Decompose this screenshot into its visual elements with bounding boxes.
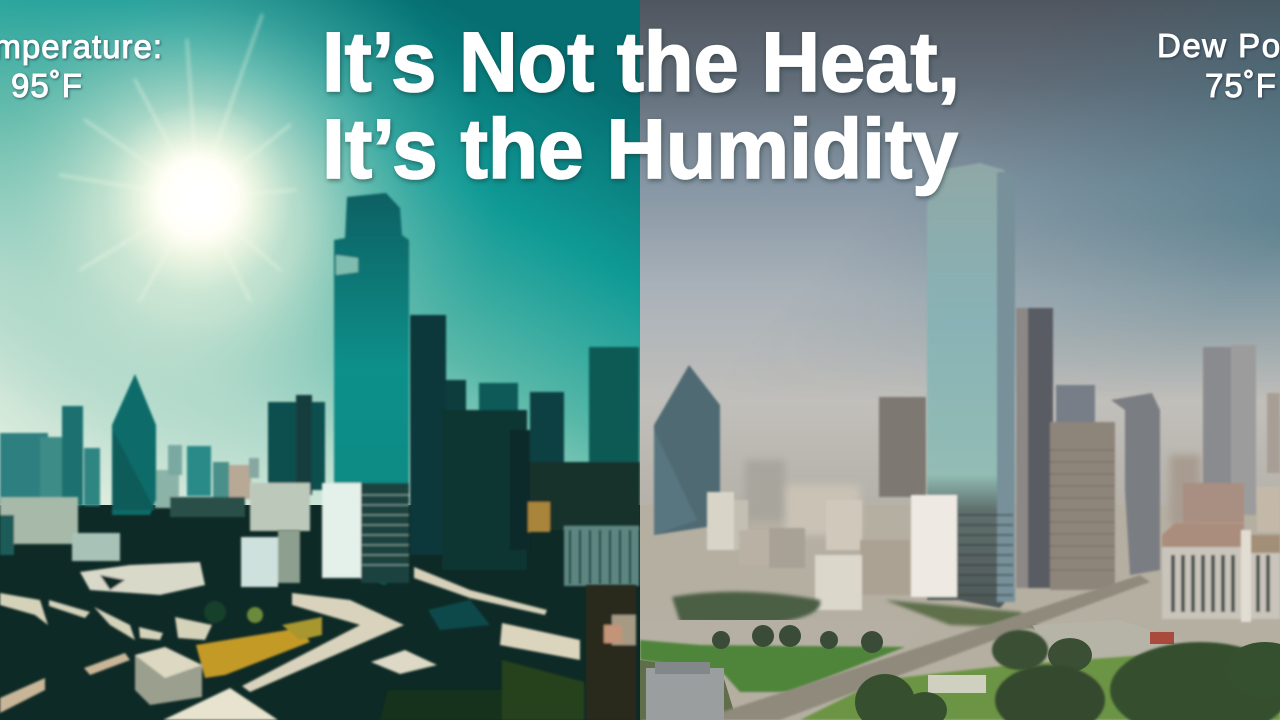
label: temperature: 95˚F bbox=[11, 67, 83, 104]
right low rise buildings bbox=[707, 492, 910, 610]
icon: sun bbox=[60, 15, 295, 300]
title bbox=[322, 15, 960, 196]
right distant buildings bbox=[745, 455, 1200, 535]
title: It’s Not the Heat, bbox=[322, 15, 960, 109]
left foreground district bbox=[0, 497, 636, 720]
right sky bbox=[640, 0, 1280, 560]
right ground bbox=[640, 575, 1280, 720]
right tall glass tower bbox=[911, 163, 1015, 608]
right ground base bbox=[640, 560, 1280, 720]
title: It’s the Humidity bbox=[322, 102, 958, 196]
panel: humid hazy city, right bbox=[640, 0, 1280, 720]
right institutional building bbox=[1162, 523, 1280, 622]
left distant skyline bbox=[0, 406, 259, 517]
right mid buildings bbox=[879, 308, 1280, 590]
label: dew point: 75˚F bbox=[1205, 67, 1277, 104]
left mid buildings bbox=[250, 315, 640, 586]
left pointed tower bbox=[112, 374, 156, 515]
left tall glass tower bbox=[322, 193, 409, 585]
right pointed tower bbox=[654, 365, 720, 535]
left sky bbox=[0, 0, 640, 505]
label: dew point bbox=[1157, 27, 1280, 104]
label: temperature bbox=[0, 28, 163, 104]
left ground base bbox=[0, 505, 640, 720]
panel: clear hot city, left bbox=[0, 0, 640, 720]
